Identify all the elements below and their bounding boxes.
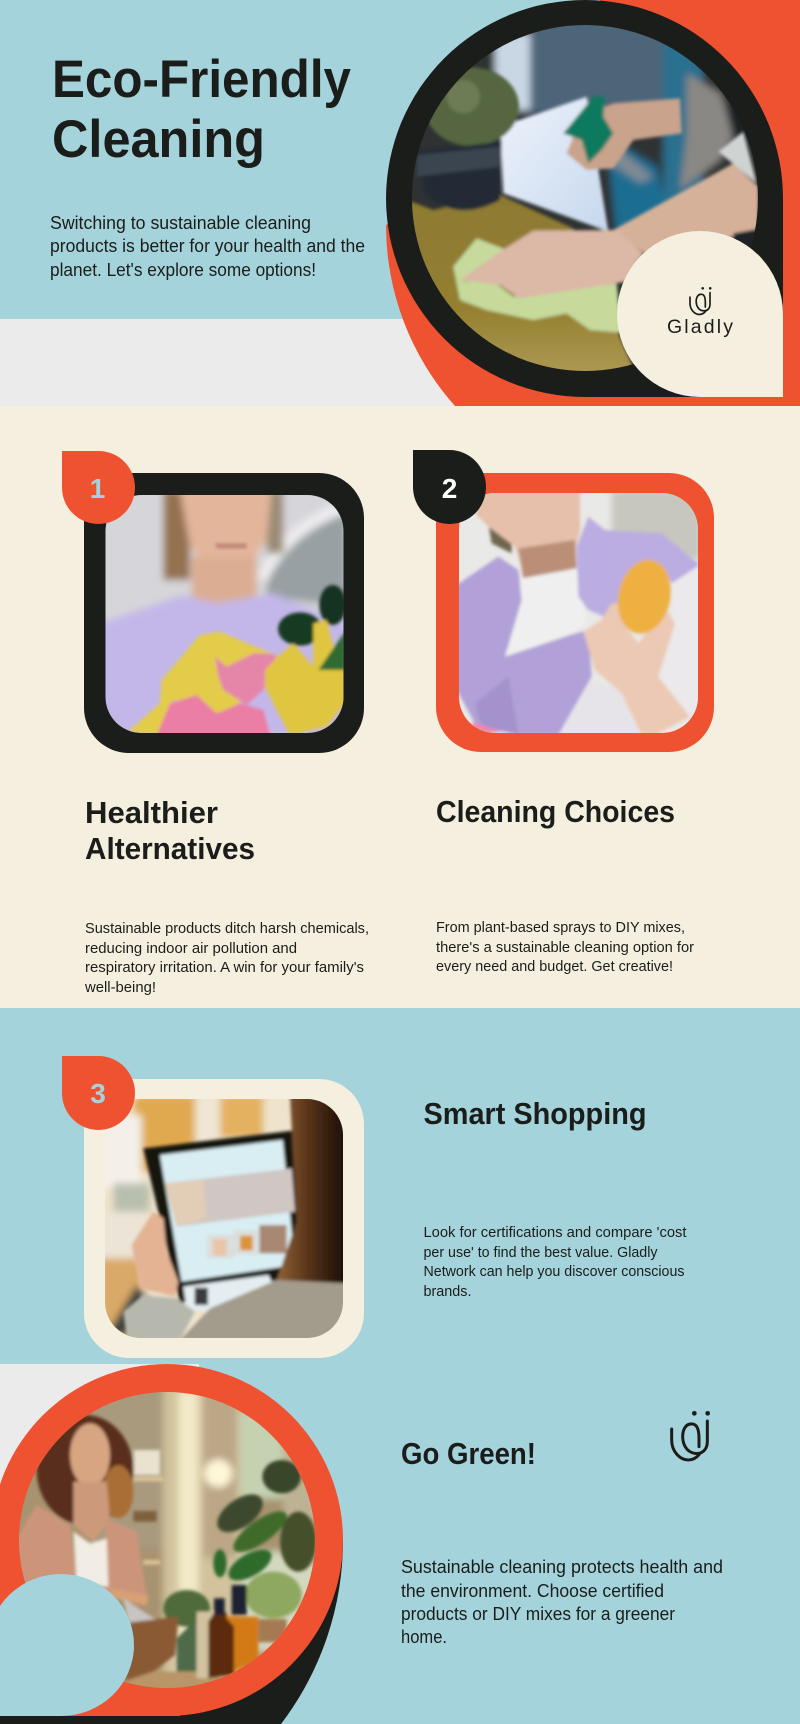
text block: smart shopping: per use' to find the best value. Gladly	[424, 1244, 658, 1261]
shape: closing black backdrop	[0, 1540, 343, 1724]
panel: lower blue background	[0, 1008, 800, 1724]
photo: woman holding a lemon	[459, 493, 698, 733]
number badge 2	[413, 450, 486, 524]
logo: Gladly mark and wordmark	[667, 287, 733, 338]
card 1: healthier alternatives image	[62, 451, 364, 753]
number badge 1: 1	[90, 473, 105, 504]
text block: healthier alternatives: reducing indoor air pollution and	[85, 940, 297, 957]
shape: blue corner teardrop	[0, 1574, 134, 1716]
heading: Smart Shopping: Smart Shopping	[424, 1096, 646, 1131]
text block: cleaning choices: every need and budget. Get creative!	[436, 958, 673, 975]
heading: Healthier Alternatives: Healthier	[85, 795, 218, 830]
text block: intro: planet. Let's explore some options!	[50, 260, 316, 280]
text block: intro: Switching to sustainable cleaning	[50, 213, 311, 233]
panel: header background	[0, 0, 800, 406]
text block: cleaning choices	[436, 919, 694, 975]
shape: grey corner behind closing image	[0, 1364, 199, 1584]
title: Eco-Friendly	[52, 50, 351, 109]
frame: cream rounded square	[84, 1079, 364, 1358]
text block: cleaning choices: there's a sustainable cleaning option for	[436, 939, 694, 956]
shape: header black frame	[386, 0, 783, 397]
number badge 1	[62, 451, 135, 524]
shape: cream logo badge	[617, 231, 783, 397]
logo: Gladly mark and wordmark: Gladly	[667, 316, 733, 338]
text block: intro	[50, 213, 365, 280]
panel: benefits background	[0, 406, 800, 1008]
card 3: smart shopping image	[62, 1056, 364, 1358]
title	[52, 50, 351, 169]
text block: intro: products is better for your health and the	[50, 236, 365, 256]
shape: header orange backdrop	[386, 0, 800, 406]
text block: healthier alternatives	[84, 920, 369, 996]
title: Cleaning	[52, 110, 265, 169]
heading: Cleaning Choices: Cleaning Choices	[436, 794, 675, 829]
number badge 3: 3	[90, 1078, 106, 1109]
text block: smart shopping: Look for certifications and compare 'cost	[424, 1224, 687, 1241]
photo: hands holding a tablet showing a shop	[105, 1099, 343, 1338]
heading: Healthier Alternatives: Alternatives	[85, 831, 255, 866]
frame: black rounded square	[84, 473, 364, 753]
text block: go green: Sustainable cleaning protects health and	[401, 1557, 723, 1577]
text block: go green: products or DIY mixes for a greener	[401, 1604, 675, 1624]
photo: woman in yellow gloves with pink cloth	[106, 495, 344, 733]
text block: healthier alternatives: Sustainable products ditch harsh chemicals,	[85, 920, 369, 937]
heading: Go Green!: Go Green!	[401, 1436, 536, 1471]
number badge 2: 2	[442, 473, 457, 504]
icon: Gladly logo mark	[672, 1411, 710, 1460]
text block: smart shopping	[424, 1224, 687, 1300]
number badge 3	[62, 1056, 135, 1130]
text block: cleaning choices: From plant-based sprays to DIY mixes,	[436, 919, 685, 936]
photo: smiling woman with plants and amber bottles	[19, 1392, 315, 1688]
photo: hand cleaning a table with a spray bottle	[412, 25, 758, 371]
text block: smart shopping: Network can help you discover conscious	[424, 1263, 684, 1280]
text block: healthier alternatives: respiratory irritation. A win for your family's	[85, 959, 364, 976]
frame: orange rounded square	[436, 473, 714, 752]
text block: healthier alternatives: well-being!	[84, 979, 156, 996]
text block: go green: home.	[401, 1627, 447, 1647]
card 2: cleaning choices image	[413, 450, 714, 752]
heading: Healthier Alternatives	[85, 795, 255, 866]
shape: closing orange frame	[0, 1364, 343, 1716]
text block: smart shopping: brands.	[424, 1283, 472, 1300]
text block: go green	[401, 1557, 723, 1647]
text block: go green: the environment. Choose certified	[401, 1581, 664, 1601]
